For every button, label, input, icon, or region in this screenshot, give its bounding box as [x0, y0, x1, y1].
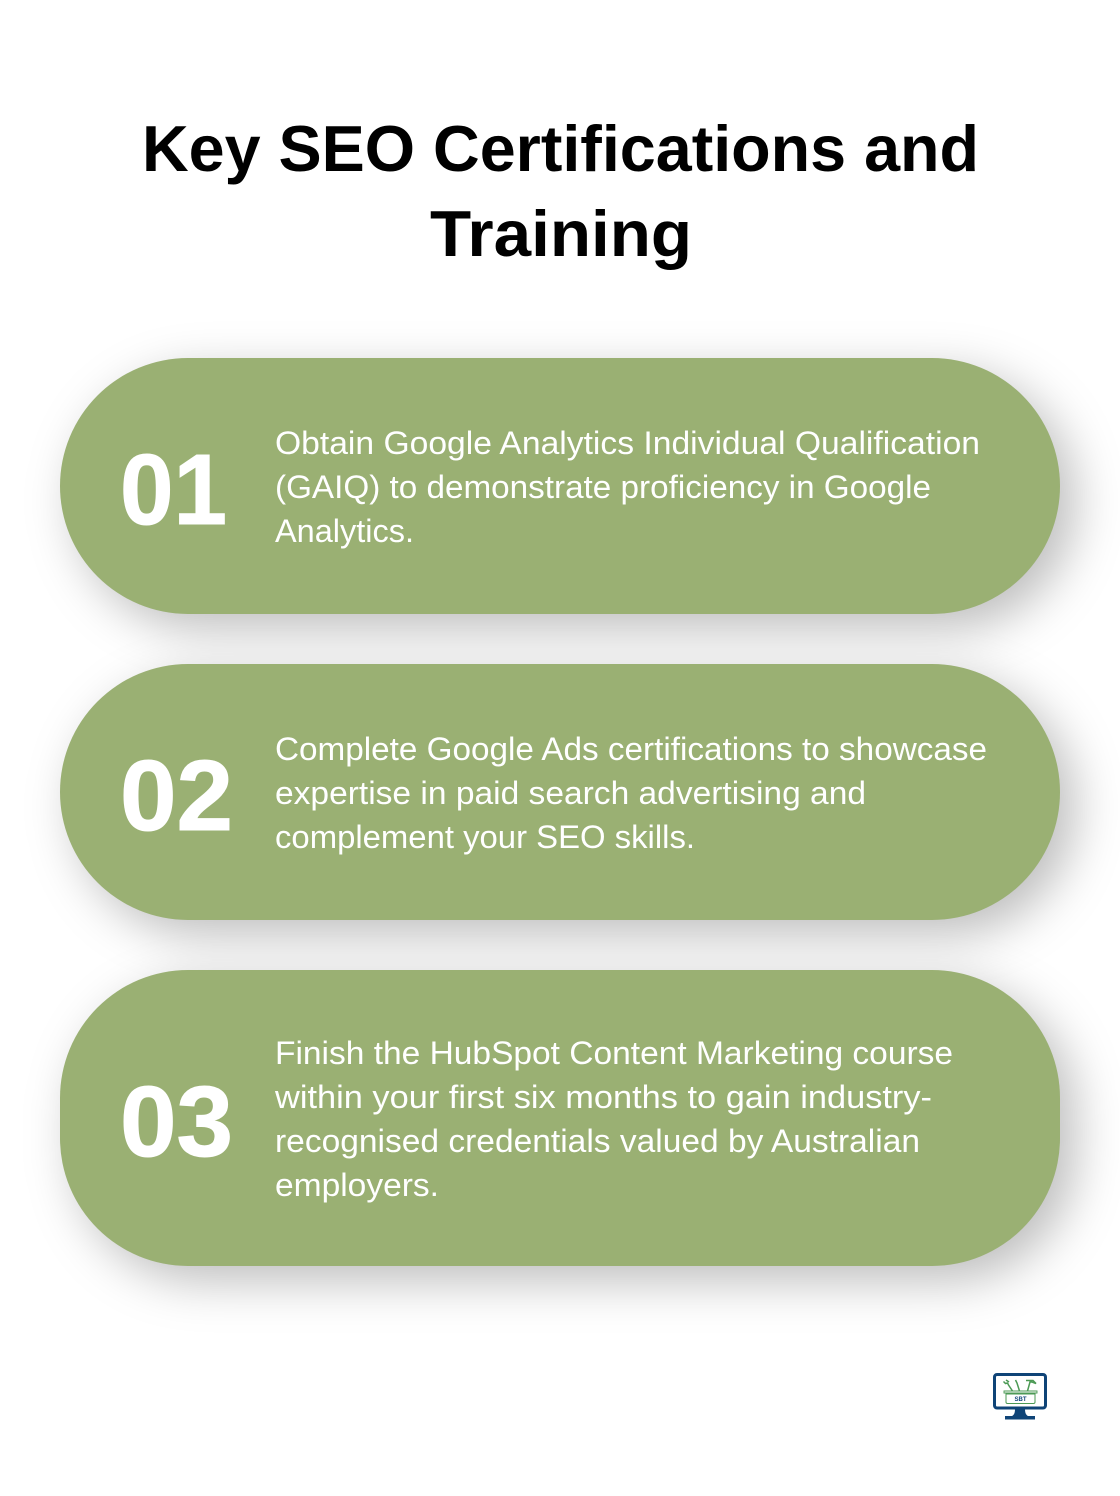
text: step 01 description: Analytics. — [275, 513, 414, 549]
icon: SBT monitor logo with toolbox — [994, 1374, 1046, 1420]
text: step 01 description: (GAIQ) to demonstrate proficiency in Google — [275, 469, 931, 505]
panel: step 02 — [60, 664, 1075, 935]
panel: step 03 — [60, 970, 1075, 1281]
number 02: 02 — [120, 740, 233, 852]
title: Key SEO Certifications and — [142, 112, 979, 185]
text: step 03 description: within your first six months to gain industry- — [274, 1079, 932, 1115]
title — [142, 112, 979, 270]
text: step 03 description: recognised credentials valued by Australian — [275, 1123, 920, 1159]
number 03: 03 — [120, 1066, 233, 1178]
number 01: 01 — [120, 434, 227, 546]
text: step 03 description — [274, 1035, 953, 1203]
text: step 02 description: expertise in paid search advertising and — [275, 775, 866, 811]
icon: SBT monitor logo with toolbox: SBT — [1014, 1397, 1027, 1403]
title: Training — [430, 197, 692, 270]
text: step 02 description: complement your SEO skills. — [275, 819, 695, 855]
text: step 01 description: Obtain Google Analytics Individual Qualification — [275, 425, 980, 461]
text: step 03 description: Finish the HubSpot Content Marketing course — [275, 1035, 953, 1071]
text: step 02 description: Complete Google Ads certifications to showcase — [275, 731, 987, 767]
text: step 01 description — [275, 425, 980, 549]
text: step 02 description — [275, 731, 987, 855]
text: step 03 description: employers. — [275, 1167, 439, 1203]
panel: step 01 — [60, 358, 1075, 629]
